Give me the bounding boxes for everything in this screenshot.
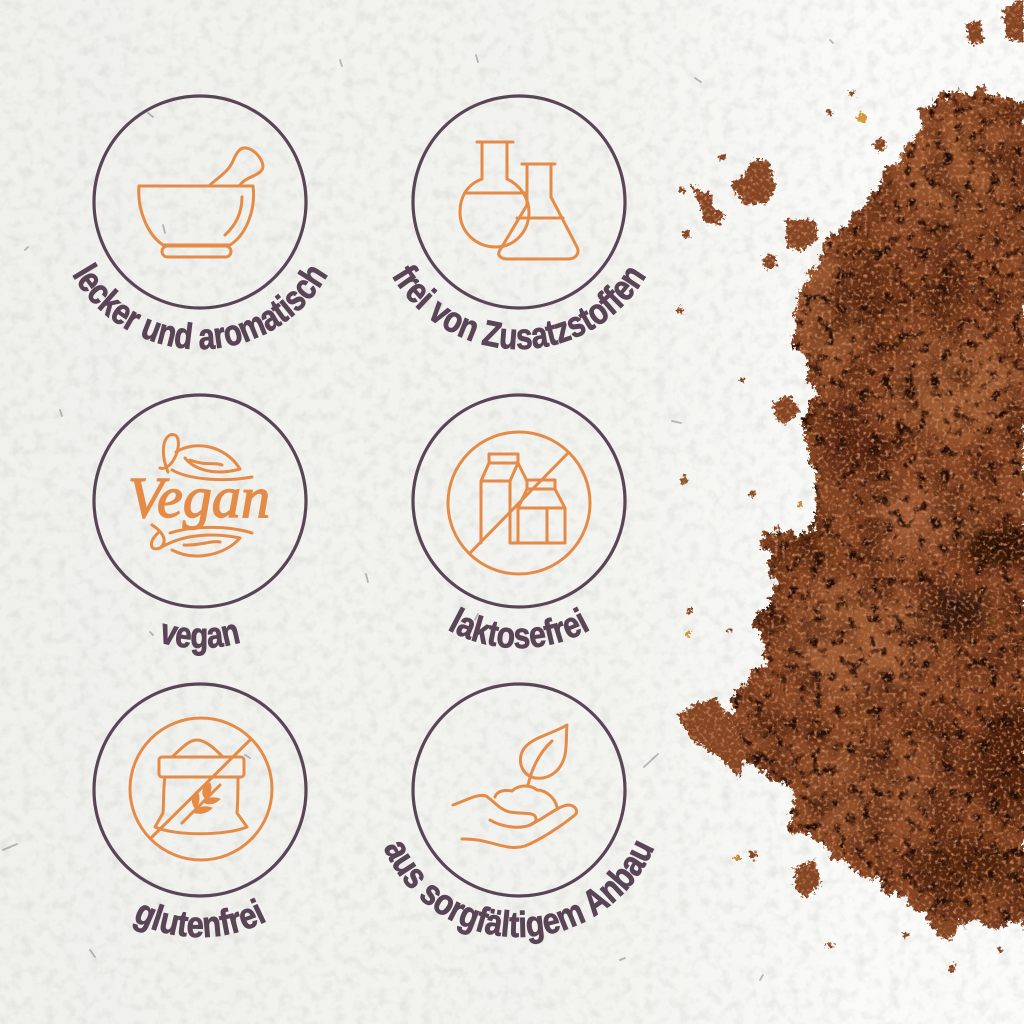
panel: glutenfrei [92,682,308,938]
powder pile [725,88,1024,925]
ring [413,96,625,308]
lettering: Vegan [128,465,270,530]
ring [94,96,306,308]
leaves [151,434,252,556]
ring [94,395,306,607]
label: vegan [162,623,240,656]
icon: crossed milk cartons [448,432,590,574]
panel: laktosefrei [411,393,627,649]
icon: lab flasks [460,142,578,259]
label: laktosefrei [448,606,590,649]
icon: mortar and pestle [139,148,263,257]
icon: vegan lettering with leaves [128,434,270,556]
ring [413,684,625,896]
scattered crumbs [677,0,1024,972]
panel: lecker und aromatisch [72,94,328,350]
label: lecker und aromatisch [72,262,328,350]
panel: frei von Zusatzstoffen [392,94,646,350]
icon: crossed flour sack [130,718,272,860]
panel: vegan [92,393,308,656]
icon: hand with seedling [453,725,577,848]
panel: aus sorgfältigem Anbau [384,682,654,944]
label: aus sorgfältigem Anbau [384,840,654,944]
ring [413,395,625,607]
label: glutenfrei [132,898,266,938]
label: frei von Zusatzstoffen [392,265,646,350]
ring [94,684,306,896]
